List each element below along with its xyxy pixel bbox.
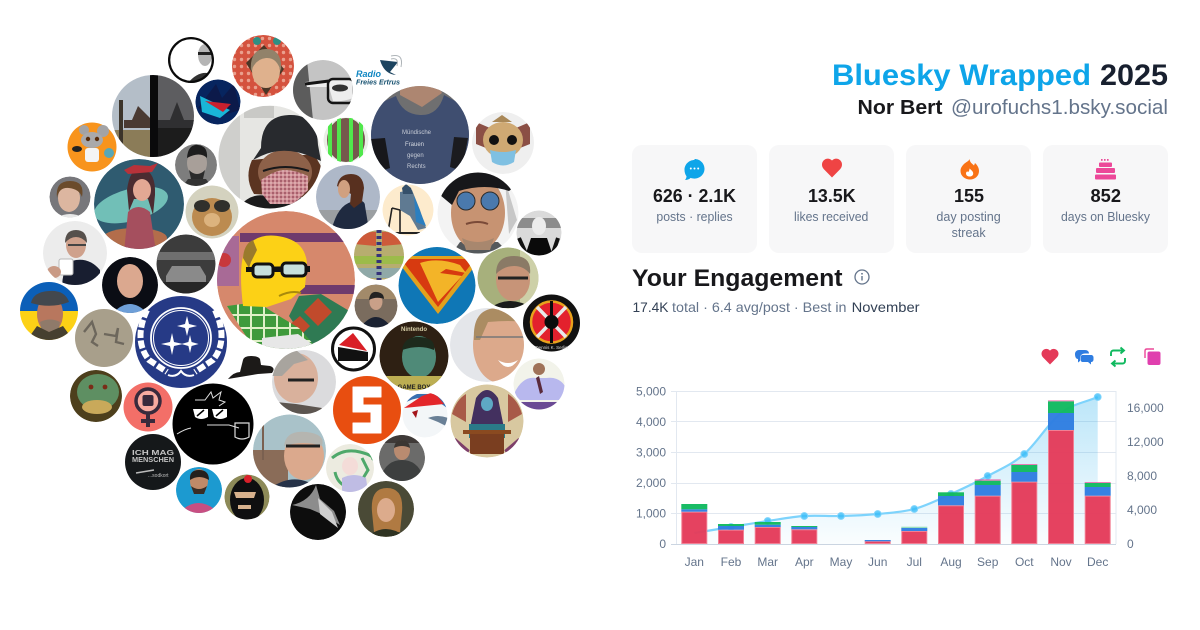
avatar: man with glasses, green background [478,248,540,308]
avatar: black and white engraving man [516,210,562,256]
line markers [728,394,1101,530]
avatar: man with cap on Ukrainian flag [20,282,78,340]
avatar: woman in profile [316,165,380,232]
avatar: grey t-shirt with slogan: Rechts [407,164,426,170]
avatar: man holding mug [43,221,107,290]
chart: monthly engagement stacked bars with cumulative line [636,384,1164,569]
avatar: smiling man at harbour [253,414,326,490]
avatar: red plane over clouds [402,392,448,438]
avatar: Radio Freies Ertrus logo [356,55,402,86]
avatar: Ich mag Menschen podcast [125,434,181,490]
avatar: old batman with walker [382,184,434,236]
stat value: 155 [954,186,984,206]
month labels: Apr [795,555,814,569]
heading: Bluesky Wrapped 2025: 2025 [1100,59,1168,92]
left axis labels: 0 [659,537,666,551]
avatar: blue fox art [196,80,240,124]
avatar: green line drawing [326,444,374,492]
stat label: days on Bluesky [1061,209,1150,224]
avatar: orange S logo [333,376,401,444]
avatar: Game Boy portrait: Nintendo [401,327,427,333]
legend: chart icons [1042,348,1160,366]
avatar: bearded man on blue [176,467,222,514]
avatar: greyscale car photo [156,234,216,294]
month labels: May [830,555,852,569]
avatar: Game Boy portrait [379,322,449,391]
stat label [936,209,1001,240]
avatar: bald man in blue shirt [102,257,158,314]
avatar: grey t-shirt with slogan: Mündische [402,130,432,136]
left axis labels: 1,000 [636,506,666,520]
avatar: feminist fist symbol [124,382,172,432]
stat label: posts · replies [656,209,733,224]
icon: birthday cake [1095,159,1116,180]
avatar: black knitted balaclava [224,474,270,522]
avatar: Radio Freies Ertrus logo: Freies Ertrus [356,80,400,86]
text: user name and handle [858,97,1168,119]
panel: stat day posting streak [906,145,1031,253]
stat value: 13.5K [808,186,856,206]
left axis labels: 5,000 [636,384,666,398]
stat label: likes received [794,209,868,224]
text: user name and handle: Nor Bert [858,97,943,119]
month labels [685,555,1108,569]
avatar: short-haired woman [50,176,90,222]
avatar: grey t-shirt with slogan: gegen [407,153,424,159]
avatar: red and black badge [330,326,377,372]
right axis labels [1127,401,1164,551]
heading: Your Engagement: Your Engagement [632,265,843,292]
stacked bars [681,400,1111,544]
avatar: close-up man with glasses, greyscale [293,60,355,120]
avatar: hyena with face mask [472,112,534,174]
right axis labels: 8,000 [1127,469,1157,483]
icon: heart [822,159,842,178]
avatar: Ich mag Menschen podcast: MENSCHEN [132,457,174,464]
heading: Bluesky Wrapped 2025: Bluesky Wrapped [832,59,1091,92]
month labels: Oct [1015,555,1034,569]
cumulative line [694,397,1098,533]
month labels: Jun [868,555,887,569]
avatar: smiling man with glasses [450,307,527,383]
month labels: Jan [685,555,704,569]
avatar: orange mouse scientist [68,122,116,172]
text: user name and handle: @urofuchs1.bsky.social [951,97,1168,119]
right axis labels: 0 [1127,537,1134,551]
avatar: bearded man, greyscale [175,144,217,190]
icon: likes [1042,349,1058,364]
stat value: 626 · 2.1K [653,186,736,206]
icon: chat bubble [684,159,704,180]
cumulative area [694,397,1098,544]
right axis labels: 16,000 [1127,401,1164,415]
icon: reposts [1111,348,1125,366]
avatar: Ich mag Menschen podcast: ...sodkort [148,473,169,479]
avatar: pencil sketch on beige paper [75,309,133,367]
text: engagement summary: total · 6.4 avg/post · Best in [672,299,846,315]
icon: info [855,270,869,284]
icon: quotes [1145,349,1160,365]
avatar: teddy bear with goggles [186,186,238,241]
panel: stat days on Bluesky [1043,145,1168,253]
avatar: mermaid fantasy art [90,159,184,252]
left axis labels: 4,000 [636,415,666,429]
avatar: Dennis K. badge: Dennis K. Serlin [535,345,568,350]
avatar: Botticelli portrait [358,481,414,537]
avatar: superman shield [398,247,478,324]
left axis labels [636,384,666,551]
avatar: man in grey jacket [379,435,425,482]
icon: flame [960,159,979,180]
stat label: streak [952,225,986,240]
month labels: Dec [1087,555,1108,569]
left axis labels: 3,000 [636,446,666,460]
avatar: older man with glasses in profile [272,350,336,416]
avatar: Dennis K. badge [523,294,580,352]
avatar: Ich mag Menschen podcast: ICH MAG [132,448,174,457]
month labels: Nov [1050,555,1072,569]
avatar: split historic gate photo [112,75,194,157]
panel: avatar bubble cluster [20,35,580,540]
avatar: colourful goddess art [450,384,524,458]
avatar: man behind green bars [324,118,368,162]
avatar: green dinosaur puppet [70,370,122,422]
icon: black cowboy hat [228,356,274,379]
avatar: cartoon man in glasses [217,211,355,354]
icon: replies [1075,350,1094,364]
month labels: Mar [757,555,778,569]
month labels: Aug [940,555,962,569]
avatar: outlined portrait [168,37,215,84]
month labels: Feb [721,555,742,569]
text: engagement summary: November [852,299,920,315]
avatar: rainbow garden path [354,230,404,280]
right axis labels: 4,000 [1127,503,1157,517]
panel: stat likes received [769,145,894,253]
avatar: grey t-shirt with slogan: Frauen [405,142,424,148]
avatar: reclining man in tie [514,358,566,412]
month labels: Jul [907,555,922,569]
avatar: woman with hat and fabric mask [218,105,322,210]
avatar: Game Boy portrait: GAME BOY [398,385,430,391]
stat value: 852 [1090,186,1121,206]
avatar: Federation emblem [135,296,227,388]
avatar: black and white long hair portrait [290,484,346,540]
avatar: Radio Freies Ertrus logo: Radio [356,69,381,79]
avatar: person in dark sweater [354,284,399,328]
avatar: woman in red patterned frame [232,35,294,97]
avatar: grey t-shirt with slogan [370,85,472,185]
panel: stat posts and replies [632,145,757,253]
right axis labels: 12,000 [1127,435,1164,449]
stat label: day posting [936,209,1001,224]
text: engagement summary [632,299,920,315]
left axis labels: 2,000 [636,476,666,490]
avatar: black cartoon character with shades [172,384,254,464]
avatar: man with beret and blue shades [438,172,518,260]
month labels: Sep [977,555,999,569]
text: engagement summary: 17.4K [632,299,669,315]
